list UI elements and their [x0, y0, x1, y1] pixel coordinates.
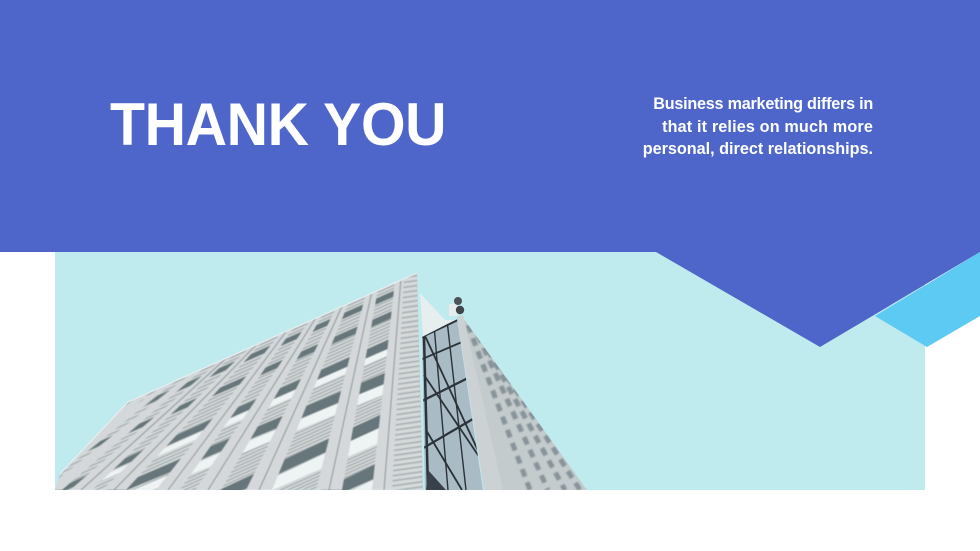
building: left facade — [55, 274, 423, 490]
photo: building against pale sky — [55, 252, 925, 490]
light blue chevron accent — [875, 252, 980, 347]
building: right facade — [455, 312, 590, 492]
sky — [55, 252, 925, 490]
body text: that it relies on much more — [662, 118, 873, 136]
building: rooftop figure — [449, 297, 464, 316]
body text: Business marketing differs in — [653, 95, 873, 113]
body text — [643, 95, 873, 158]
building: corner end wall — [420, 293, 457, 338]
blue header banner with chevron — [0, 0, 980, 347]
body text: personal, direct relationships. — [643, 140, 873, 158]
building: roof edge highlight — [60, 273, 417, 474]
title: THANK YOU — [110, 91, 446, 158]
building: corner pillar — [457, 315, 497, 490]
building: glass curtain wall — [422, 319, 483, 490]
